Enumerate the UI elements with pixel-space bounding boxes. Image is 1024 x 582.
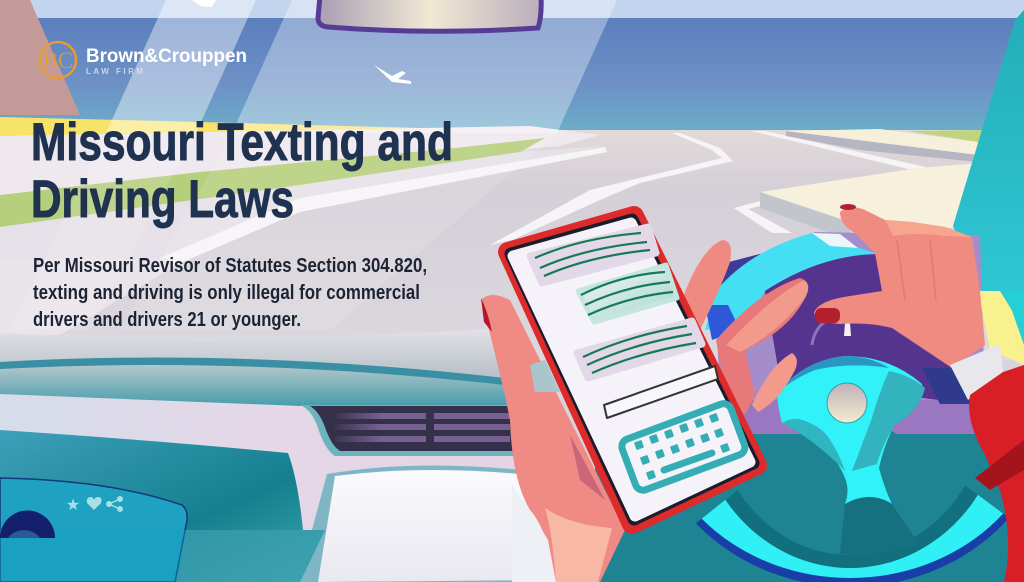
- phone screen: [513, 223, 750, 516]
- glove box: [298, 465, 545, 582]
- screen lower reflection: [0, 530, 186, 582]
- phone: [508, 216, 757, 524]
- logo subtitle: LAW FIRM: [86, 67, 143, 76]
- nail: upper finger: [840, 204, 856, 210]
- title: [31, 113, 453, 229]
- body text: drivers and drivers 21 or younger.: [33, 308, 301, 331]
- body text: [33, 254, 427, 331]
- seat yellow: [978, 291, 1024, 365]
- cliff: [0, 0, 80, 115]
- curb and pavement: [760, 129, 985, 240]
- icon: share: [107, 497, 122, 511]
- road and land: [0, 117, 1024, 360]
- icon: star: ★: [66, 495, 80, 514]
- steering wheel rim: [696, 430, 1006, 582]
- watch band: [950, 344, 1003, 400]
- message bubble 2: [578, 265, 677, 322]
- phone bezel: [511, 220, 753, 519]
- steering wheel spokes: [778, 356, 925, 504]
- body text: texting and driving is only illegal for commercial: [33, 281, 420, 304]
- road markings: [490, 131, 930, 245]
- logo ring: BC: [43, 48, 73, 73]
- area behind wheel: [695, 232, 1024, 440]
- windshield light beams: [10, 0, 617, 330]
- steering wheel: [696, 356, 1006, 582]
- pillar: [953, 10, 1024, 320]
- bird: [374, 65, 411, 84]
- shirt cuff: [512, 485, 556, 582]
- fingers behind phone: [682, 240, 808, 415]
- phone body: [508, 216, 757, 524]
- icon: heart: [87, 497, 102, 510]
- right hand: [814, 207, 985, 368]
- steering wheel lower section: [840, 497, 919, 555]
- red sleeve: [969, 365, 1024, 582]
- left teal panel: [0, 430, 325, 582]
- message bubble 3: [577, 321, 702, 378]
- body text: Per Missouri Revisor of Statutes Section 304.820,: [33, 254, 427, 277]
- input field: [604, 366, 718, 418]
- nail: lower finger: [815, 308, 840, 323]
- logo name: Brown&Crouppen: [86, 46, 247, 67]
- left hand: [481, 295, 625, 582]
- infotainment screen: [0, 478, 187, 582]
- steering wheel hub: [827, 383, 867, 423]
- gauge arc: [0, 511, 55, 538]
- logo ring: [40, 42, 76, 78]
- small bird: [192, 0, 216, 7]
- sea: [0, 18, 1024, 136]
- cyan seat edge: [1005, 291, 1024, 345]
- green verge right: [908, 130, 988, 143]
- message bubble 1: [530, 227, 656, 283]
- seat and floor behind wheel: [595, 434, 1024, 582]
- title: Driving Laws: [31, 170, 294, 229]
- title: Missouri Texting and: [31, 113, 453, 172]
- sky: [0, 0, 1024, 19]
- keyboard: [620, 401, 747, 492]
- dashboard: [0, 328, 540, 582]
- rear-view mirror: [318, 0, 541, 31]
- air vent: [300, 405, 520, 456]
- logo: [40, 42, 247, 78]
